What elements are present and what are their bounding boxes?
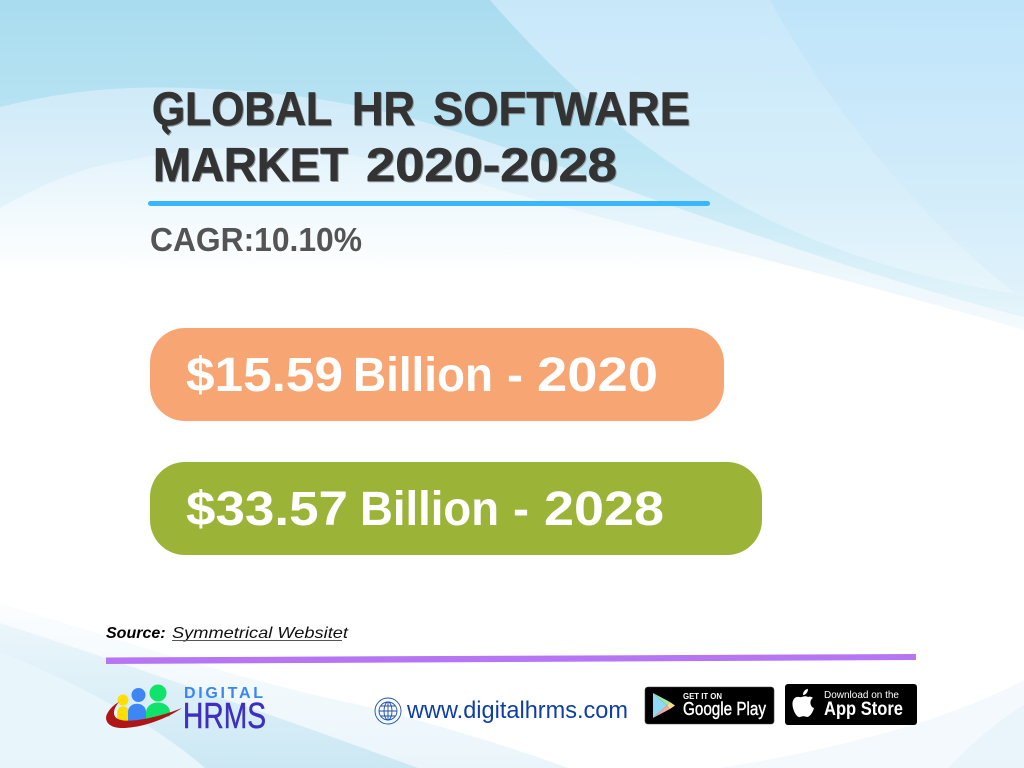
title: HR bbox=[352, 82, 415, 135]
logo: red swoosh bbox=[106, 702, 182, 728]
title underline bbox=[148, 201, 710, 206]
source note bbox=[106, 625, 349, 642]
badge: Google Play: GET IT ON bbox=[683, 691, 722, 701]
title: GLOBAL bbox=[152, 82, 332, 135]
source note: Symmetrical Websitet bbox=[172, 625, 349, 642]
badge: Google Play bbox=[645, 687, 774, 724]
title: SOFTWARE bbox=[433, 82, 690, 135]
logo wordmark bbox=[183, 685, 266, 736]
value pill: 2028: 2028 bbox=[544, 483, 664, 536]
value pill: 2020 bbox=[150, 328, 724, 421]
value pill: 2020: - bbox=[507, 349, 523, 402]
value pill: 2020: 2020 bbox=[537, 349, 658, 402]
icon: play triangle bbox=[653, 693, 675, 718]
badge: App Store: App Store bbox=[824, 699, 903, 720]
logo wordmark: DIGITAL bbox=[184, 685, 263, 702]
logo wordmark: HRMS bbox=[183, 695, 266, 736]
value pill: 2028: Billion bbox=[360, 483, 499, 536]
icon: globe bbox=[375, 698, 401, 724]
website url: www.digitalhrms.com bbox=[406, 697, 628, 724]
badge: App Store: Download on the bbox=[824, 690, 899, 701]
value pill: 2028: $33.57 bbox=[186, 483, 348, 536]
title: MARKET bbox=[153, 138, 348, 191]
logo: green person bbox=[146, 684, 170, 722]
footer divider bbox=[106, 654, 916, 664]
badge: Google Play: Google Play bbox=[683, 699, 766, 719]
logo: yellow person bbox=[117, 694, 129, 723]
value pill: 2028 bbox=[150, 462, 762, 555]
badge: App Store bbox=[785, 684, 917, 725]
title bbox=[152, 82, 690, 191]
title: 2020-2028 bbox=[366, 138, 617, 191]
CAGR label: CAGR:10.10% bbox=[150, 221, 362, 258]
source note: Source: bbox=[106, 625, 166, 642]
value pill: 2020: $15.59 bbox=[186, 349, 343, 402]
value pill: 2020: Billion bbox=[353, 349, 493, 402]
icon: apple bbox=[792, 689, 814, 717]
logo: blue person bbox=[128, 688, 146, 724]
logo: Digital HRMS bbox=[106, 684, 266, 736]
value pill: 2028: - bbox=[513, 483, 529, 536]
